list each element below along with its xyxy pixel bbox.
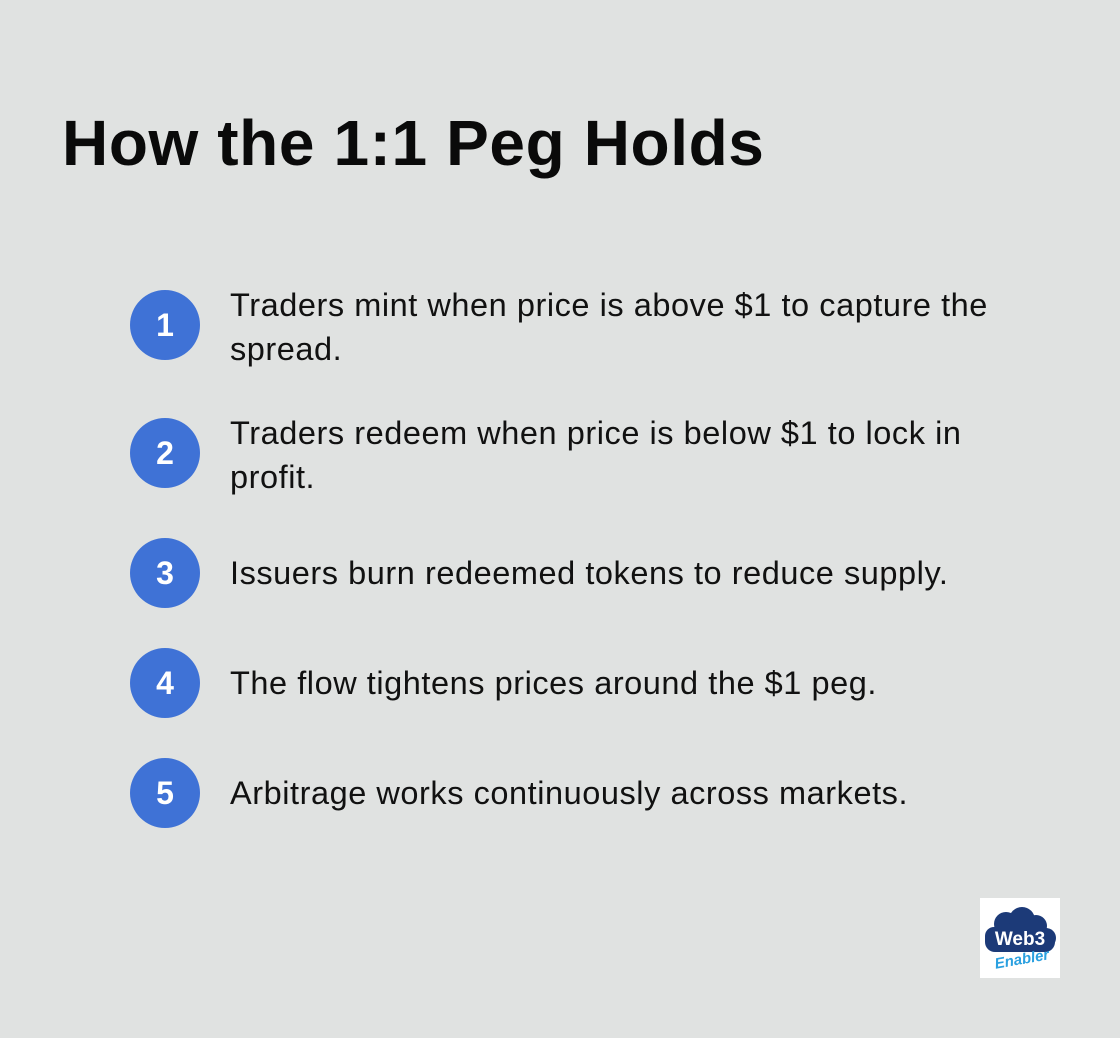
text 5: Arbitrage works continuously across markets. <box>230 775 908 811</box>
badge 2 <box>130 418 200 488</box>
badge 4 <box>130 648 200 718</box>
title: How the 1:1 Peg Holds <box>62 107 764 179</box>
logo: Web3 <box>995 929 1045 950</box>
icon: cloud <box>985 907 1056 952</box>
badge 5 <box>130 758 200 828</box>
text 2: Traders redeem when price is below $1 to lock in profit. <box>230 415 962 495</box>
badge 1: 1 <box>156 307 174 343</box>
step 1 <box>130 287 988 367</box>
badge 4: 4 <box>156 665 174 701</box>
logo: Enabler <box>993 946 1052 973</box>
text 1: Traders mint when price is above $1 to capture the spread. <box>230 287 988 367</box>
step 2 <box>130 415 962 495</box>
text 4: The flow tightens prices around the $1 peg. <box>230 665 877 701</box>
badge 2: 2 <box>156 435 174 471</box>
badge 5: 5 <box>156 775 174 811</box>
badge 3 <box>130 538 200 608</box>
badge 3: 3 <box>156 555 174 591</box>
logo <box>980 898 1060 978</box>
step 5 <box>130 758 908 828</box>
step 3 <box>130 538 948 608</box>
text 3: Issuers burn redeemed tokens to reduce supply. <box>230 555 948 591</box>
badge 1 <box>130 290 200 360</box>
step 4 <box>130 648 877 718</box>
